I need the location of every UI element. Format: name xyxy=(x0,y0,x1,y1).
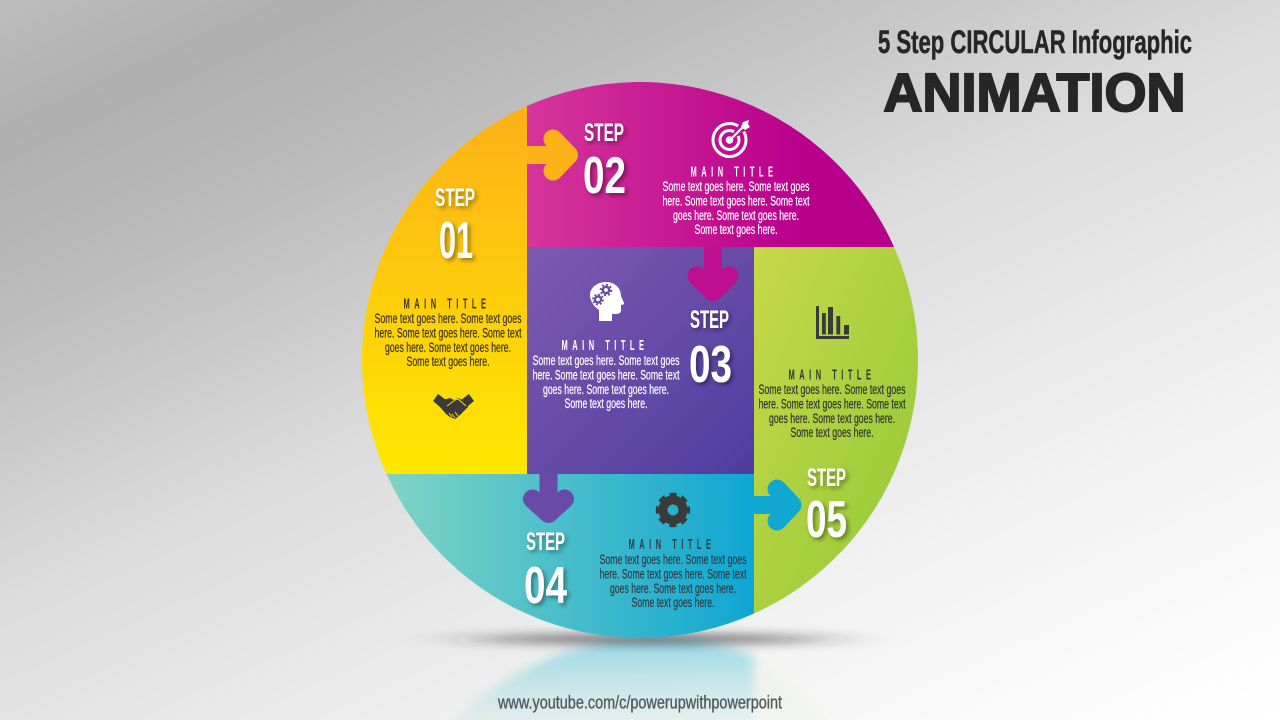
step label 01 xyxy=(435,184,475,270)
text block: step 05: here. Some text goes here. Some text xyxy=(758,396,906,412)
text block: step 02: goes here. Some text goes here. xyxy=(673,208,799,223)
icon: target with arrow xyxy=(713,120,750,156)
text block: step 03: MAIN TITLE xyxy=(562,337,648,354)
ground shadow xyxy=(470,634,830,644)
text block: step 04: goes here. Some text goes here. xyxy=(610,581,736,596)
text block: step 03: here. Some text goes here. Some text xyxy=(532,368,680,382)
text block: step 02: Some text goes here. Some text goes xyxy=(662,179,810,194)
step label 05 xyxy=(806,464,847,549)
arrow: step 03 to 04 xyxy=(532,474,564,514)
arrow: step 01 to 02 xyxy=(527,139,568,171)
icon: handshake xyxy=(433,394,474,419)
text block: step 01: here. Some text goes here. Some text xyxy=(374,326,522,340)
panel: step 02 magenta xyxy=(527,82,894,292)
text block: step 05: Some text goes here. xyxy=(790,425,874,440)
text block: step 01: Some text goes here. Some text goes xyxy=(374,311,522,326)
text block: step 04: Some text goes here. xyxy=(632,595,714,610)
text block: step 05 xyxy=(758,366,906,440)
step label 03: STEP xyxy=(690,306,729,334)
step label 02: 02 xyxy=(583,147,626,205)
text block: step 04: MAIN TITLE xyxy=(628,536,716,553)
text block: step 04 xyxy=(600,536,747,610)
text block: step 04: here. Some text goes here. Some text xyxy=(600,566,747,582)
text block: step 05: MAIN TITLE xyxy=(788,366,876,384)
reflection of the circle xyxy=(440,638,835,720)
icon: gear xyxy=(658,495,688,525)
title: animation: ANIMATION xyxy=(884,63,1186,123)
text block: step 03: goes here. Some text goes here. xyxy=(543,382,669,397)
text block: step 01 xyxy=(374,296,522,369)
step label 05: 05 xyxy=(806,491,847,549)
text block: step 02: MAIN TITLE xyxy=(690,164,778,180)
step label 03: 03 xyxy=(689,336,732,394)
text block: step 05: Some text goes here. Some text goes xyxy=(758,382,906,397)
website url: www.youtube.com/c/powerupwithpowerpoint xyxy=(497,692,782,712)
text block: step 02 xyxy=(662,164,810,237)
text block: step 04: Some text goes here. Some text goes xyxy=(600,552,747,567)
text block: step 01: MAIN TITLE xyxy=(404,296,490,312)
panel: step 03 purple xyxy=(527,247,754,514)
panel: step 05 green xyxy=(754,247,918,614)
step label 02 xyxy=(583,119,626,205)
arrow: step 04 to 05 xyxy=(754,489,792,521)
icon: bar chart xyxy=(816,306,849,339)
title xyxy=(878,24,1192,123)
arrow: step 02 to 03 xyxy=(697,247,729,292)
step label 01: 01 xyxy=(439,212,473,270)
step label 05: STEP xyxy=(807,464,846,492)
icon: head with gears xyxy=(590,282,624,321)
text block: step 05: goes here. Some text goes here. xyxy=(769,411,895,426)
text block: step 01: Some text goes here. xyxy=(406,354,490,369)
text block: step 03 xyxy=(532,337,680,411)
step label 01: STEP xyxy=(435,184,475,212)
step label 04: 04 xyxy=(524,557,567,615)
step label 02: STEP xyxy=(584,119,624,147)
step label 03 xyxy=(689,306,732,394)
panel: step 01 yellow xyxy=(362,106,568,474)
text block: step 02: Some text goes here. xyxy=(694,222,778,237)
text block: step 03: Some text goes here. Some text goes xyxy=(532,353,680,368)
text block: step 02: here. Some text goes here. Some text xyxy=(662,194,810,208)
text block: step 01: goes here. Some text goes here. xyxy=(385,340,511,355)
text block: step 03: Some text goes here. xyxy=(564,396,648,411)
step label 04: STEP xyxy=(526,528,565,556)
step label 04 xyxy=(524,528,567,615)
panel: step 04 teal xyxy=(386,474,792,638)
